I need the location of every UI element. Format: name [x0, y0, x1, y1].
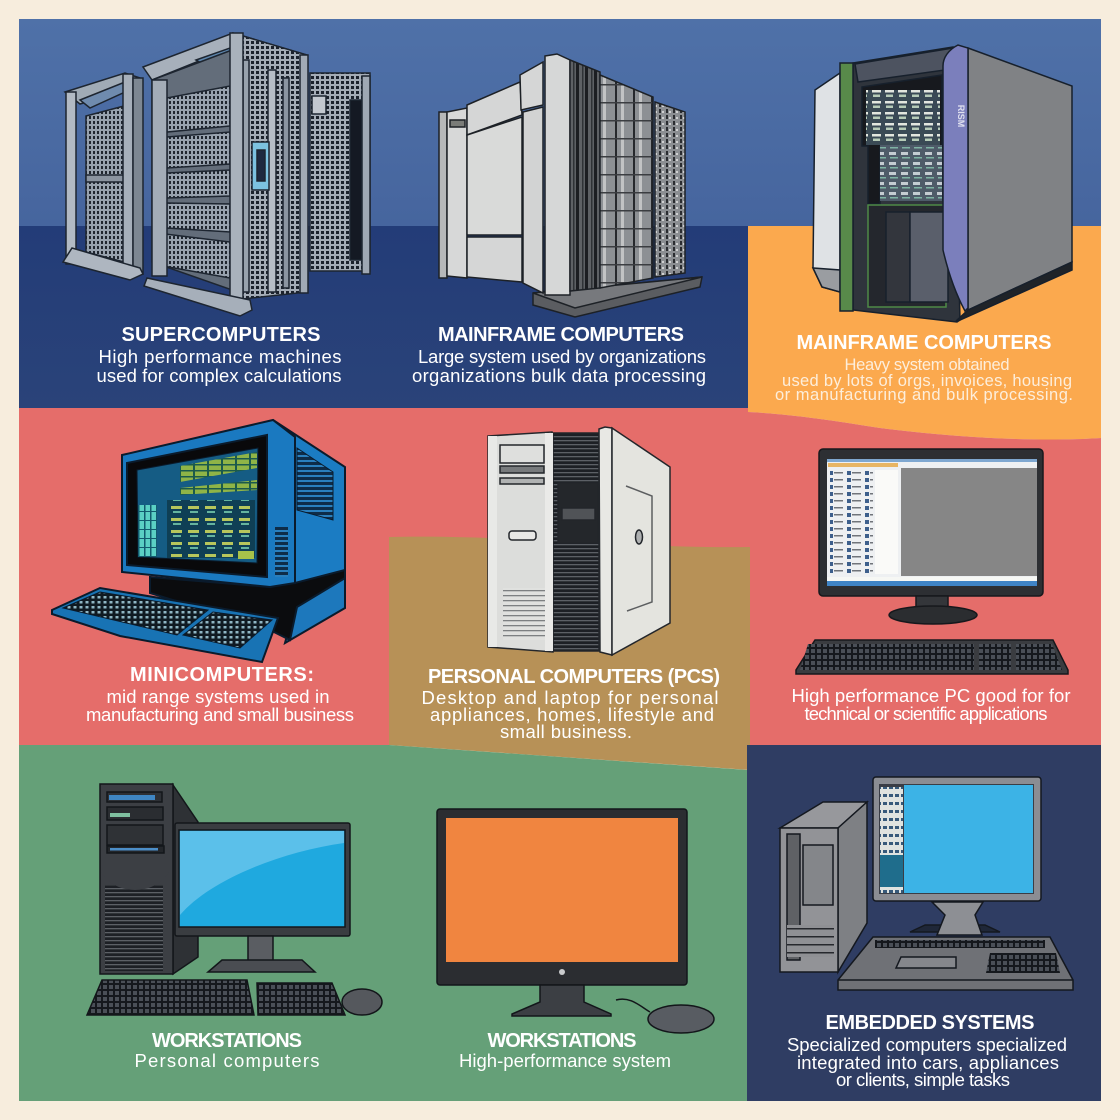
text: minicomputers: MINICOMPUTERS: — [130, 664, 314, 686]
illustration: white tower PC — [488, 427, 670, 655]
text: mainframe computers orange: or manufacturing and bulk processing. — [775, 386, 1073, 404]
text: workstations left: WORKSTATIONS — [152, 1030, 302, 1052]
illustration: orange screen monitor — [437, 809, 714, 1033]
text: high performance PC: High performance PC good for for — [792, 685, 1070, 706]
text: workstations left — [134, 1030, 320, 1071]
text: embedded systems — [787, 1012, 1067, 1090]
text: supercomputers: High performance machines — [98, 346, 342, 367]
panel: orange mainframe background — [748, 226, 1101, 440]
illustration: mainframe tower on orange — [813, 45, 1072, 322]
text: workstations left: Personal computers — [134, 1050, 320, 1071]
text: embedded systems: EMBEDDED SYSTEMS — [826, 1012, 1034, 1034]
panel: green bottom background — [19, 745, 748, 1101]
text: workstations middle — [459, 1030, 671, 1071]
text: mainframe computers: organizations bulk data processing — [412, 365, 706, 386]
text: minicomputers: mid range systems used in — [106, 686, 330, 707]
text: embedded systems: or clients, simple tasks — [836, 1069, 1010, 1090]
text: personal computers: appliances, homes, lifestyle and — [430, 704, 714, 725]
icon: mainframe side badge: RISM — [956, 105, 966, 127]
text: high performance PC — [792, 685, 1070, 724]
panel: navy embedded background — [747, 745, 1101, 1101]
text: personal computers: small business. — [500, 721, 632, 742]
illustration: black tower desktop — [87, 784, 382, 1015]
text: embedded systems: integrated into cars, appliances — [797, 1052, 1059, 1073]
text: personal computers: Desktop and laptop for personal — [422, 687, 718, 708]
text: mainframe computers: MAINFRAME COMPUTERS — [438, 324, 684, 346]
text: personal computers — [422, 666, 720, 742]
text: mainframe computers orange — [775, 332, 1073, 404]
text: workstations middle: High-performance system — [459, 1050, 671, 1071]
text: mainframe computers: Large system used by organizations — [418, 346, 706, 367]
text: mainframe computers — [412, 324, 706, 386]
illustration: mainframe cabinet — [439, 54, 702, 317]
text: embedded systems: Specialized computers specialized — [787, 1034, 1067, 1055]
illustration: embedded system desktop — [780, 777, 1073, 990]
text: minicomputers — [86, 664, 354, 725]
text: workstations middle: WORKSTATIONS — [488, 1030, 636, 1052]
illustration: supercomputer racks — [63, 33, 370, 316]
panel: brown personal computers background — [389, 537, 750, 770]
panel: top blue background — [19, 19, 1101, 408]
text: high performance PC: technical or scientific applications — [804, 703, 1048, 724]
text: minicomputers: manufacturing and small business — [86, 704, 354, 725]
text: mainframe computers orange: used by lots of orgs, invoices, housing — [782, 372, 1072, 390]
text: personal computers: PERSONAL COMPUTERS (PCS) — [428, 666, 720, 688]
text: mainframe computers orange: Heavy system obtained — [844, 356, 1010, 374]
text: mainframe computers orange: MAINFRAME COMPUTERS — [796, 332, 1052, 354]
illustration: blue minicomputer — [52, 420, 345, 662]
panel: red middle background — [19, 408, 1101, 745]
text: supercomputers: SUPERCOMPUTERS — [122, 324, 320, 346]
illustration: monitor and keyboard on red — [796, 449, 1068, 674]
text: supercomputers: used for complex calculations — [96, 365, 342, 386]
text: supercomputers — [96, 324, 342, 386]
